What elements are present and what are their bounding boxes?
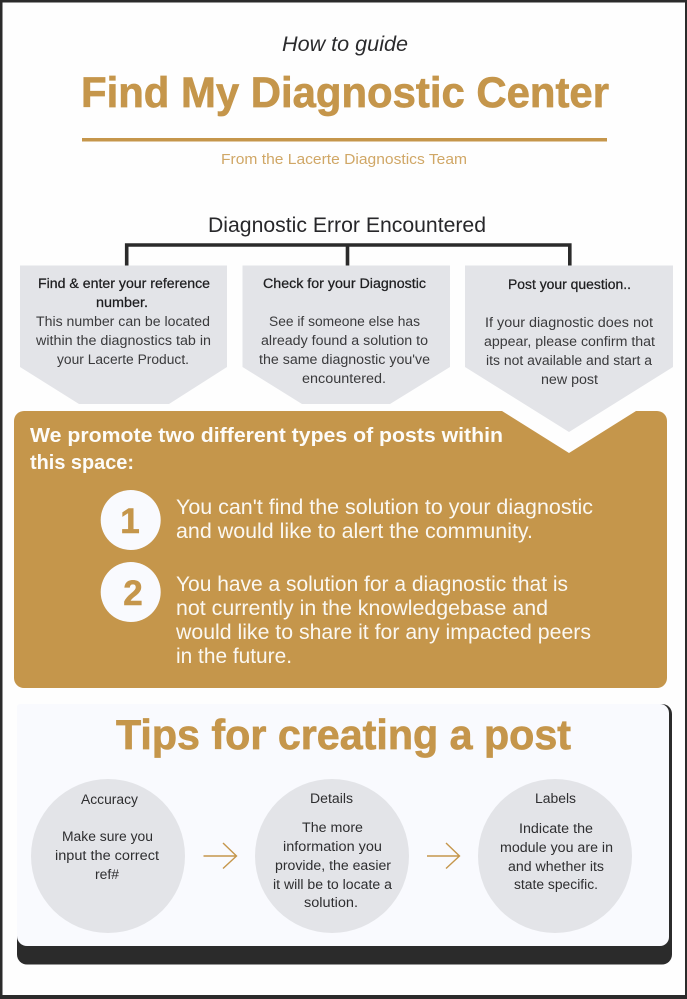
- panel: step 2: [242, 266, 450, 404]
- step 2 heading: Check for your Diagnostic: [263, 276, 426, 291]
- tip: labels: state specific.: [514, 877, 598, 892]
- number badge 1: [101, 490, 161, 550]
- step 1 heading: Find & enter your reference: [38, 276, 210, 291]
- tips heading: Tips for creating a post: [116, 711, 571, 758]
- panel shadow: [17, 704, 672, 964]
- step 3 text: [484, 315, 655, 387]
- tip: labels: Labels: [535, 791, 576, 806]
- step 3 text: appear, please confirm that: [484, 334, 655, 349]
- post type 1 text: [176, 496, 593, 543]
- panel: step 3: [465, 266, 673, 432]
- step 2 text: encountered.: [302, 371, 386, 386]
- step 1 text: within the diagnostics tab in: [35, 333, 211, 348]
- title: find my diagnostic center: Find My Diagnostic Center: [81, 69, 609, 117]
- post type 2 text: would like to share it for any impacted peers: [175, 621, 591, 644]
- flow heading: Diagnostic Error Encountered: [208, 213, 486, 237]
- step 1 text: [35, 314, 211, 367]
- step 2 text: See if someone else has: [269, 314, 420, 329]
- tip: details: it will be to locate a: [273, 877, 393, 892]
- title: how to guide: How to guide: [282, 33, 408, 56]
- panel: tips for creating a post: [17, 704, 672, 964]
- tip: details: Details: [310, 791, 353, 806]
- panel heading: this space:: [30, 451, 134, 474]
- tip: accuracy: [31, 779, 185, 933]
- post type 1 text: You can't find the solution to your diagnostic: [176, 496, 593, 519]
- number badge 2: [101, 562, 161, 622]
- post type 2 text: [175, 573, 591, 668]
- step 3 heading: Post your question..: [508, 277, 631, 292]
- number badge 1: 1: [120, 502, 140, 541]
- step 1 heading: [38, 276, 210, 310]
- connector bracket: [127, 245, 570, 266]
- post type 2 text: not currently in the knowledgebase and: [176, 597, 548, 620]
- step 3 text: If your diagnostic does not: [485, 315, 653, 330]
- panel heading: [30, 424, 503, 474]
- panel: two types of posts: [14, 411, 667, 688]
- tip: accuracy: input the correct: [55, 848, 159, 863]
- panel surface: [17, 704, 669, 946]
- tip: accuracy: Accuracy: [81, 792, 138, 807]
- post type 2 text: in the future.: [176, 645, 292, 668]
- tip: details: [255, 779, 409, 933]
- step 3 text: new post: [541, 372, 598, 387]
- step 3 text: its not available and start a: [486, 353, 652, 368]
- subtitle: From the Lacerte Diagnostics Team: [221, 151, 467, 168]
- tip: details: solution.: [304, 895, 358, 910]
- tip: details: The more: [302, 820, 363, 835]
- tip: labels: module you are in: [500, 840, 613, 855]
- tip: accuracy: Make sure you: [62, 829, 153, 844]
- tip: details: provide, the easier: [275, 858, 392, 873]
- arrow: details to labels: [427, 843, 460, 868]
- step 2 text: [259, 314, 430, 386]
- step 1 text: your Lacerte Product.: [57, 352, 189, 367]
- arrow: accuracy to details: [204, 843, 236, 868]
- number badge 2: 2: [123, 574, 143, 613]
- panel: step 1: [20, 266, 227, 404]
- tip: labels: and whether its: [508, 859, 604, 874]
- step 1 heading: number.: [96, 295, 148, 310]
- post type 1 text: and would like to alert the community.: [176, 520, 533, 543]
- step 2 text: the same diagnostic you've: [259, 352, 430, 367]
- tip: labels: Indicate the: [519, 821, 593, 836]
- step 1 text: This number can be located: [36, 314, 210, 329]
- heading rule: [82, 138, 607, 142]
- tip: accuracy: ref#: [95, 867, 120, 882]
- panel heading: We promote two different types of posts within: [30, 424, 503, 447]
- tip: details: information you: [283, 839, 382, 854]
- header: [81, 33, 609, 168]
- step 2 text: already found a solution to: [261, 333, 428, 348]
- tip: labels: [478, 779, 632, 933]
- post type 2 text: You have a solution for a diagnostic that is: [176, 573, 568, 596]
